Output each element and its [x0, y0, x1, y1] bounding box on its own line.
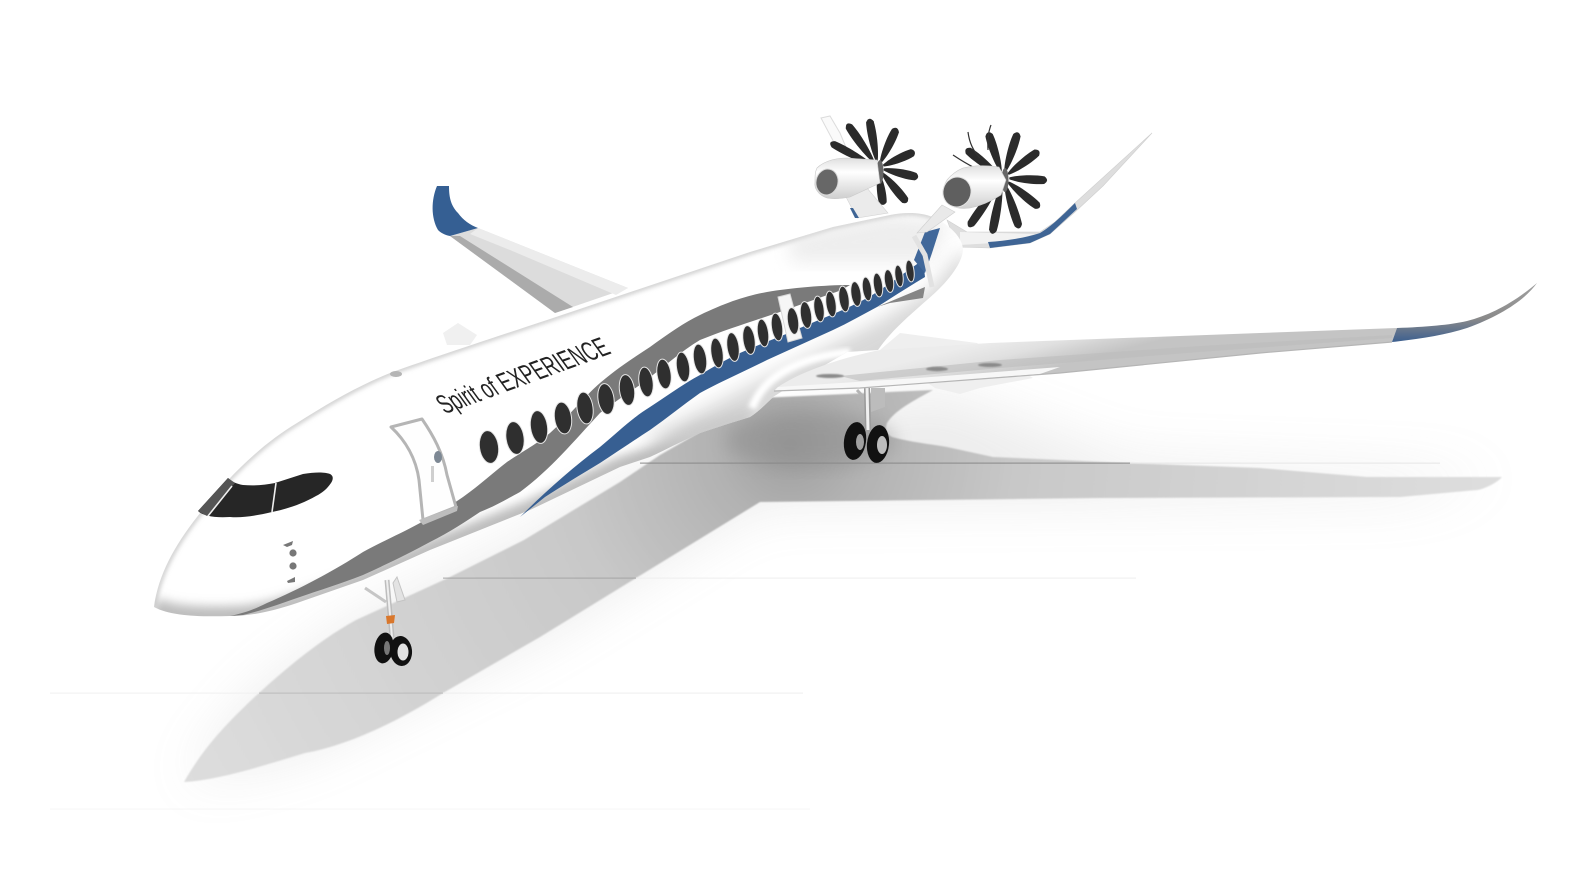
antenna dot — [390, 371, 402, 377]
wheel contact shadow — [725, 412, 895, 468]
rear blue panel — [914, 228, 940, 273]
cabin windows — [477, 260, 915, 465]
rear grey cheatline — [877, 287, 925, 307]
emergency exit — [778, 294, 802, 342]
tail engine pylon — [917, 205, 955, 233]
nacelle — [815, 158, 880, 199]
aircraft name: Spirit of EXPERIENCE — [430, 332, 616, 420]
wing grey flap strip — [840, 335, 1392, 381]
fuselage shading — [154, 213, 990, 616]
ground shadow — [50, 323, 1502, 810]
pylon — [845, 188, 888, 218]
near winglet — [1392, 283, 1537, 342]
tail blue tip — [988, 203, 1077, 248]
far winglet — [433, 186, 478, 236]
fan blades — [829, 118, 919, 205]
aircraft rendering scene — [50, 116, 1537, 810]
blue cheatline — [520, 260, 925, 517]
engine left with fan — [814, 116, 919, 218]
cockpit windshield — [198, 472, 333, 517]
engine right with fan — [940, 125, 1047, 235]
fuselage — [154, 205, 990, 616]
rear strut seam — [914, 236, 932, 287]
fan hub — [1002, 168, 1008, 192]
fan blades — [953, 125, 1047, 235]
cabin door — [391, 419, 458, 525]
main landing gear — [841, 388, 891, 464]
far wing — [433, 186, 628, 313]
near wing — [774, 283, 1537, 391]
grey cheatline — [230, 285, 850, 616]
nacelle — [943, 166, 1006, 208]
V-tail right — [947, 133, 1152, 248]
fan blade: white hidden blade — [821, 116, 850, 157]
nose sensors — [283, 541, 297, 583]
nose landing gear — [365, 577, 414, 667]
fan hub — [876, 160, 884, 184]
wing leading edge highlight — [774, 367, 1060, 391]
